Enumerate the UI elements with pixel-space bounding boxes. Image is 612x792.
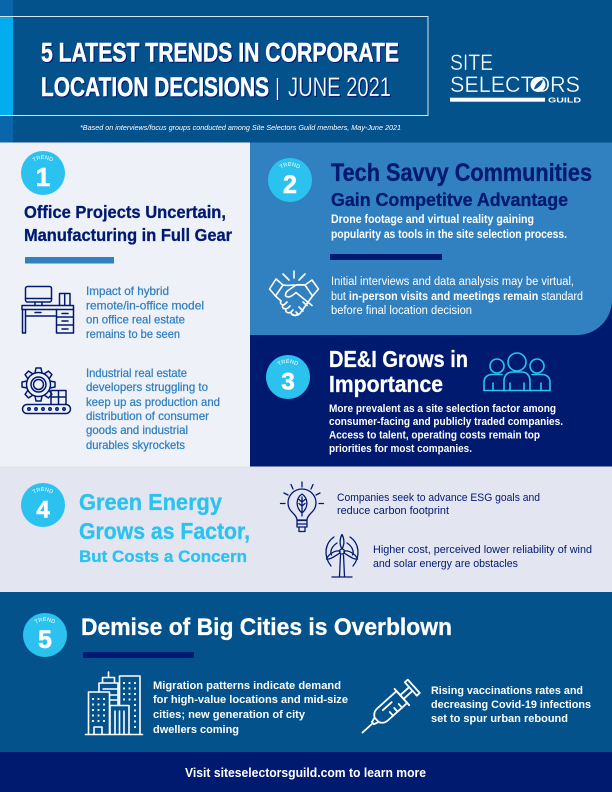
badge: trend 2: 2 (283, 171, 297, 199)
logo: Site Selectors Guild (450, 50, 581, 105)
heading: trend 5: Demise of Big Cities is Overblown (81, 614, 452, 641)
title: | (276, 74, 280, 100)
badge: trend 3: 3 (281, 368, 295, 396)
text: industrial real estate: distribution of consumer (86, 409, 209, 423)
text: trend 2 detail (331, 276, 583, 317)
heading: trend 4: Grows as Factor, (79, 518, 250, 544)
logo: Site Selectors Guild: SELECTORS (450, 72, 580, 97)
title: JUNE 2021 (288, 72, 391, 102)
text: vaccinations (431, 685, 591, 725)
badge: trend 5 (23, 613, 67, 657)
text: industrial real estate: Industrial real estate (86, 366, 187, 380)
logo: Site Selectors Guild: SITE (450, 50, 493, 75)
text: trend 3 body: Access to talent, operating costs remain top (329, 430, 540, 442)
text: trend 2 detail: before final location decision (331, 305, 472, 317)
text: industrial real estate: goods and industrial (86, 423, 188, 437)
heading: trend 4: Green Energy (79, 489, 222, 515)
text: migration patterns: Migration patterns indicate demand (153, 680, 341, 692)
icon: handshake (270, 271, 318, 315)
badge: trend 3 (266, 355, 310, 399)
badge: trend 1 (21, 151, 65, 195)
title: 5 LATEST TRENDS IN CORPORATE (41, 38, 399, 68)
text: trend 2 intro: popularity as tools in the site selection process. (331, 229, 567, 241)
icon: city buildings (86, 672, 142, 734)
badge: trend 1: TREND (32, 155, 53, 162)
text: wind and solar: Higher cost, perceived lower reliability of wind (373, 544, 592, 556)
heading: trend 4: But Costs a Concern (79, 547, 247, 566)
text: migration patterns (153, 680, 348, 736)
text: hybrid office (86, 284, 204, 341)
text: trend 3 body: priorities for most companies. (329, 443, 472, 455)
badge: trend 4: 4 (36, 496, 50, 524)
title (41, 38, 399, 102)
heading: trend 3 (329, 346, 468, 397)
icon: gear and conveyor (22, 368, 70, 414)
icon: eco light bulb (280, 482, 324, 532)
text: trend 3 body: More prevalent as a site selection factor among (329, 403, 556, 415)
badge: trend 4: TREND (32, 487, 53, 494)
badge: trend 5: TREND (34, 617, 55, 624)
footer: Visit siteselectorsguild.com to learn more (185, 766, 426, 780)
text: hybrid office: remains to be seen (86, 327, 180, 341)
divider bar (25, 257, 114, 264)
badge: trend 2 (268, 158, 312, 202)
text: industrial real estate: durables skyrockets (86, 438, 185, 452)
icon: syringe (355, 678, 421, 741)
text: vaccinations: decreasing Covid-19 infections (431, 699, 591, 711)
badge: trend 1: 1 (36, 162, 50, 192)
heading: trend 3: Importance (329, 371, 443, 397)
heading: trend 3: DE&I Grows in (329, 346, 468, 372)
divider bar (330, 254, 442, 260)
text: trend 3 body (329, 403, 563, 455)
badge: trend 2: TREND (279, 162, 300, 168)
text: migration patterns: dwellers coming (153, 724, 239, 736)
text: trend 2 intro: Drone footage and virtual reality gaining (331, 214, 534, 226)
text: trend 2 detail: Initial interviews and data analysis may be virtual, (331, 276, 574, 288)
text: ESG goals: reduce carbon footprint (337, 505, 449, 517)
text: migration patterns: for high-value locations and mid-size (153, 694, 348, 706)
text: industrial real estate: keep up as production and (86, 395, 220, 409)
panel: header (0, 0, 612, 142)
text: trend 2 detail: but in-person visits and meetings remain standard (331, 291, 583, 303)
text: industrial real estate (86, 366, 220, 452)
panel: trend 2 (250, 142, 612, 335)
divider bar (83, 652, 194, 658)
logo: Site Selectors Guild: GUILD (548, 98, 581, 105)
icon: office desk (22, 286, 74, 333)
text: hybrid office: remote/in-office model (86, 298, 204, 312)
footnote: *Based on interviews/focus groups conducted among Site Selectors Guild members, May-June 2021 (80, 123, 401, 132)
icon: people (484, 353, 550, 390)
text: migration patterns: cities; new generation of city (153, 709, 306, 721)
text: hybrid office: on office real estate (86, 312, 185, 326)
text: ESG goals (337, 492, 540, 517)
footer (0, 752, 612, 792)
text: vaccinations: set to spur urban rebound (431, 713, 568, 725)
icon: wind turbine (326, 534, 358, 577)
heading: trend 1: Office Projects Uncertain, (24, 202, 226, 222)
text: hybrid office: Impact of hybrid (86, 284, 169, 298)
text: vaccinations: Rising vaccinations rates and (431, 685, 583, 697)
heading: trend 4 (79, 489, 250, 566)
panel: trend 3 (250, 302, 612, 466)
badge: trend 4 (21, 483, 65, 527)
text: industrial real estate: developers struggling to (86, 380, 208, 394)
heading: trend 1: Manufacturing in Full Gear (24, 225, 232, 245)
panel: trend 1 (0, 142, 250, 466)
panel: trend 4 (0, 466, 612, 592)
heading: trend 2 (331, 159, 592, 210)
badge: trend 5: 5 (38, 626, 52, 654)
text: ESG goals: Companies seek to advance ESG goals and (337, 492, 540, 504)
panel: trend 5 (23, 613, 591, 736)
heading: trend 2: Gain Competitve Advantage (331, 190, 568, 210)
text: trend 2 intro (331, 214, 567, 241)
text: wind and solar: and solar energy are obstacles (373, 558, 518, 570)
title: LOCATION DECISIONS (41, 72, 269, 102)
badge: trend 3: TREND (277, 359, 298, 366)
text: wind and solar (373, 544, 592, 570)
heading: trend 1 (24, 202, 232, 245)
text: trend 3 body: consumer-facing and publicly traded companies. (329, 416, 563, 428)
